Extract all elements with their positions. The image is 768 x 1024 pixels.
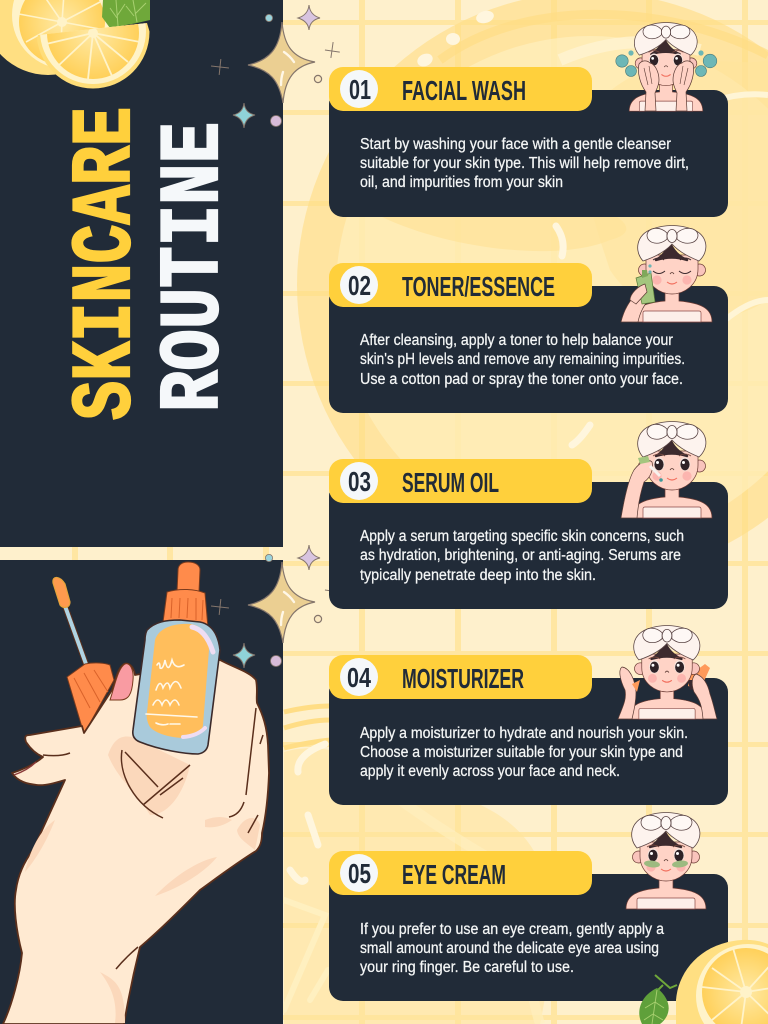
- heading bar: [329, 67, 592, 111]
- icon: serum bottle: [133, 562, 220, 754]
- card 2: toner / essence: [329, 226, 728, 413]
- heading bar: [329, 655, 592, 699]
- title line: Routine: ROUTINE: [148, 122, 243, 412]
- description: Use a cotton pad or spray the toner onto your face.: [360, 371, 683, 388]
- number badge: [340, 266, 378, 304]
- description: your ring finger. Be careful to use.: [360, 959, 574, 976]
- heading bar: [329, 263, 592, 307]
- description: [360, 332, 685, 388]
- icon: lemon slices top left: [0, 0, 150, 88]
- title line: Skincare: SKINCARE: [60, 107, 155, 420]
- card body: [329, 678, 728, 805]
- icon: front half slice: [38, 23, 150, 88]
- number badge: 05: [348, 858, 371, 889]
- heading bar: [329, 851, 592, 895]
- heading: FACIAL WASH: [402, 75, 526, 106]
- card body: [329, 874, 728, 1001]
- number badge: [340, 462, 378, 500]
- card body: [329, 482, 728, 609]
- description: If you prefer to use an eye cream, gently apply a: [360, 921, 664, 938]
- icon: girl applying serum: [621, 422, 712, 518]
- description: small amount around the delicate eye area using: [360, 940, 659, 957]
- card 5: eye cream: [329, 812, 728, 1001]
- card 3: serum oil: [329, 422, 728, 609]
- card 4: moisturizer: [329, 625, 728, 805]
- description: apply it evenly across your face and neck.: [360, 763, 620, 780]
- heading: EYE CREAM: [402, 859, 506, 890]
- sparkles upper: [210, 5, 341, 128]
- card body: [329, 286, 728, 413]
- description: Apply a serum targeting specific skin concerns, such: [360, 528, 684, 545]
- description: Apply a moisturizer to hydrate and nourish your skin.: [360, 725, 688, 742]
- icon: lemon: [676, 940, 768, 1024]
- heading bar: [329, 459, 592, 503]
- heading: TONER/ESSENCE: [402, 271, 555, 302]
- description: Start by washing your face with a gentle cleanser: [360, 136, 671, 153]
- number badge: [340, 854, 378, 892]
- icon: thumbnail: [110, 664, 133, 700]
- description: [360, 725, 688, 780]
- icon: girl applying moisturizer: [618, 625, 717, 719]
- description: After cleansing, apply a toner to help balance your: [360, 332, 673, 349]
- panel: hand background: [0, 560, 283, 1024]
- number badge: [340, 658, 378, 696]
- number badge: 01: [349, 74, 371, 105]
- icon: hand: [3, 660, 269, 1024]
- heading: SERUM OIL: [402, 467, 499, 498]
- description: [360, 136, 689, 191]
- icon: leaf and stem: [639, 975, 677, 1024]
- description: oil, and impurities from your skin: [360, 174, 563, 191]
- icon: girl applying toner: [621, 226, 712, 322]
- panel: title background: [0, 0, 283, 547]
- description: typically penetrate deep into the skin.: [360, 567, 596, 584]
- description: [360, 921, 664, 976]
- number badge: 02: [348, 270, 371, 301]
- icon: dropper wand: [53, 577, 114, 734]
- description: skin's pH levels and remove any remaining impurities.: [360, 351, 685, 368]
- number badge: 03: [348, 466, 371, 497]
- title: [60, 107, 243, 420]
- icon: leaf: [102, 0, 150, 28]
- description: [360, 528, 684, 584]
- description: Choose a moisturizer suitable for your skin type and: [360, 744, 683, 761]
- number badge: [340, 70, 378, 108]
- number badge: 04: [347, 662, 371, 693]
- heading: MOISTURIZER: [402, 663, 524, 694]
- icon: hand holding serum bottle: [3, 562, 269, 1024]
- card body: [329, 90, 728, 217]
- card 1: facial wash: [329, 22, 728, 217]
- description: as hydration, brightening, or anti-aging. Serums are: [360, 547, 681, 564]
- description: suitable for your skin type. This will help remove dirt,: [360, 155, 689, 172]
- sparkles lower: [210, 545, 341, 668]
- icon: girl with eye patches: [626, 812, 706, 909]
- icon: girl washing face: [616, 22, 717, 111]
- icon: lemon and leaf bottom right: [639, 935, 768, 1024]
